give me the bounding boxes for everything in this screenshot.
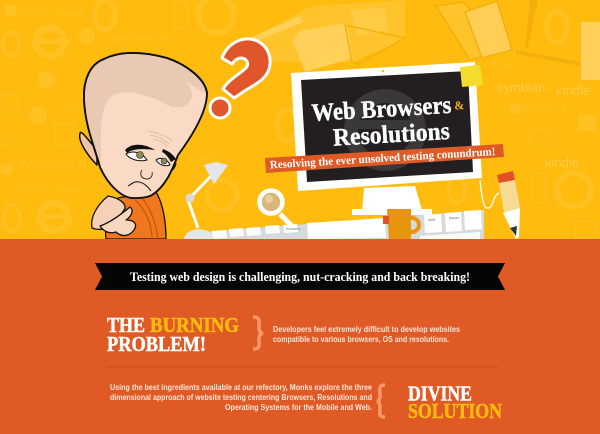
heading: the burning problem: PROBLEM!: [107, 332, 206, 356]
icon: question mark: [210, 39, 270, 118]
title: Resolutions: [332, 118, 451, 152]
monitor frame: [291, 62, 482, 191]
monk robe: [106, 192, 166, 239]
heading: the burning problem: THE: [107, 313, 145, 337]
background pattern of faint platform logos: Windows 8: [18, 156, 87, 172]
background device illustrations: [250, 0, 600, 80]
monk ear: [80, 132, 97, 165]
text block: problem description: compatible to various browsers, OS and resolutions.: [273, 334, 449, 344]
heading: divine solution: DIVINE: [408, 382, 472, 406]
faint browser logo on the screen: [345, 96, 425, 164]
keyboard: paper: [449, 215, 460, 220]
character: monk: [80, 53, 207, 239]
background pattern of faint platform logos: kindle: [0, 139, 24, 149]
background pattern of faint platform logos: kindle: [556, 83, 590, 98]
power cord: [480, 180, 499, 208]
background pattern of faint platform logos: BlackBerry: [111, 31, 169, 45]
title: [311, 91, 467, 153]
monitor stand: [362, 186, 422, 211]
heading: the burning problem: [107, 313, 239, 356]
heading: the burning problem: BURNING: [150, 313, 239, 337]
heading: divine solution: SOLUTION: [408, 399, 502, 423]
title: Web Browsers: [311, 92, 452, 127]
brace: solution: [377, 385, 385, 417]
monk eyes: [126, 152, 147, 161]
background pattern of faint platform logos: symbian: [497, 80, 545, 95]
desk lamp: [184, 162, 228, 239]
sticky note: [460, 65, 483, 87]
monk forehead wrinkles: [148, 131, 172, 146]
background pattern of faint platform logos: Kindle: [190, 153, 221, 165]
monitor: [291, 62, 483, 215]
text block: solution description: dimensional approach of website testing centering Browsers, Resolutions and: [110, 392, 372, 402]
keyboard: [200, 210, 484, 239]
text block: problem description: [273, 324, 460, 344]
keyboard: shift: [428, 217, 436, 222]
background pattern of faint platform logos: Windows Phone: [18, 8, 83, 18]
brace: problem: [253, 317, 263, 349]
mug: [383, 209, 419, 239]
monk nose and mouth: [141, 170, 152, 179]
monk eyebrows: [125, 145, 155, 153]
banner: tagline ribbon: Testing web design is challenging, nut-cracking and back breaking!: [130, 269, 470, 284]
panel: orange content section: [0, 239, 600, 434]
background pattern of faint platform logos: Windows Phone: [18, 184, 83, 194]
background pattern of faint platform logos: kindle: [545, 155, 579, 170]
background pattern of faint platform logos: symbian: [64, 102, 98, 112]
text block: solution description: Operating Systems for the Mobile and Web.: [225, 402, 372, 412]
magnifying glass: [260, 190, 292, 226]
monitor screen: [301, 71, 473, 182]
text block: problem description: Developers feel extremely difficult to develop websites: [273, 324, 460, 334]
subtitle ribbon: Resolving the ever unsolved testing conundrum!: [269, 146, 496, 171]
monk face highlight: [100, 79, 206, 198]
keyboard: browsers: [286, 227, 300, 231]
monk head: [84, 53, 207, 198]
banner: tagline ribbon: [95, 263, 505, 290]
background pattern of faint platform logos: droid: [490, 60, 512, 71]
text block: solution description: Using the best ingredients available at our refectory, Monks explore the three: [110, 382, 372, 392]
text block: solution description: [110, 382, 372, 412]
heading: divine solution: [408, 382, 502, 423]
title: &: [454, 98, 465, 113]
background pattern of faint platform logos: Windows 8: [522, 103, 566, 113]
background pattern of faint platform logos: [0, 0, 597, 237]
panel: yellow hero background: [0, 0, 600, 239]
pencil: [497, 171, 520, 239]
monk arm: [92, 196, 125, 229]
background pattern of faint platform logos: aws: [545, 67, 563, 78]
